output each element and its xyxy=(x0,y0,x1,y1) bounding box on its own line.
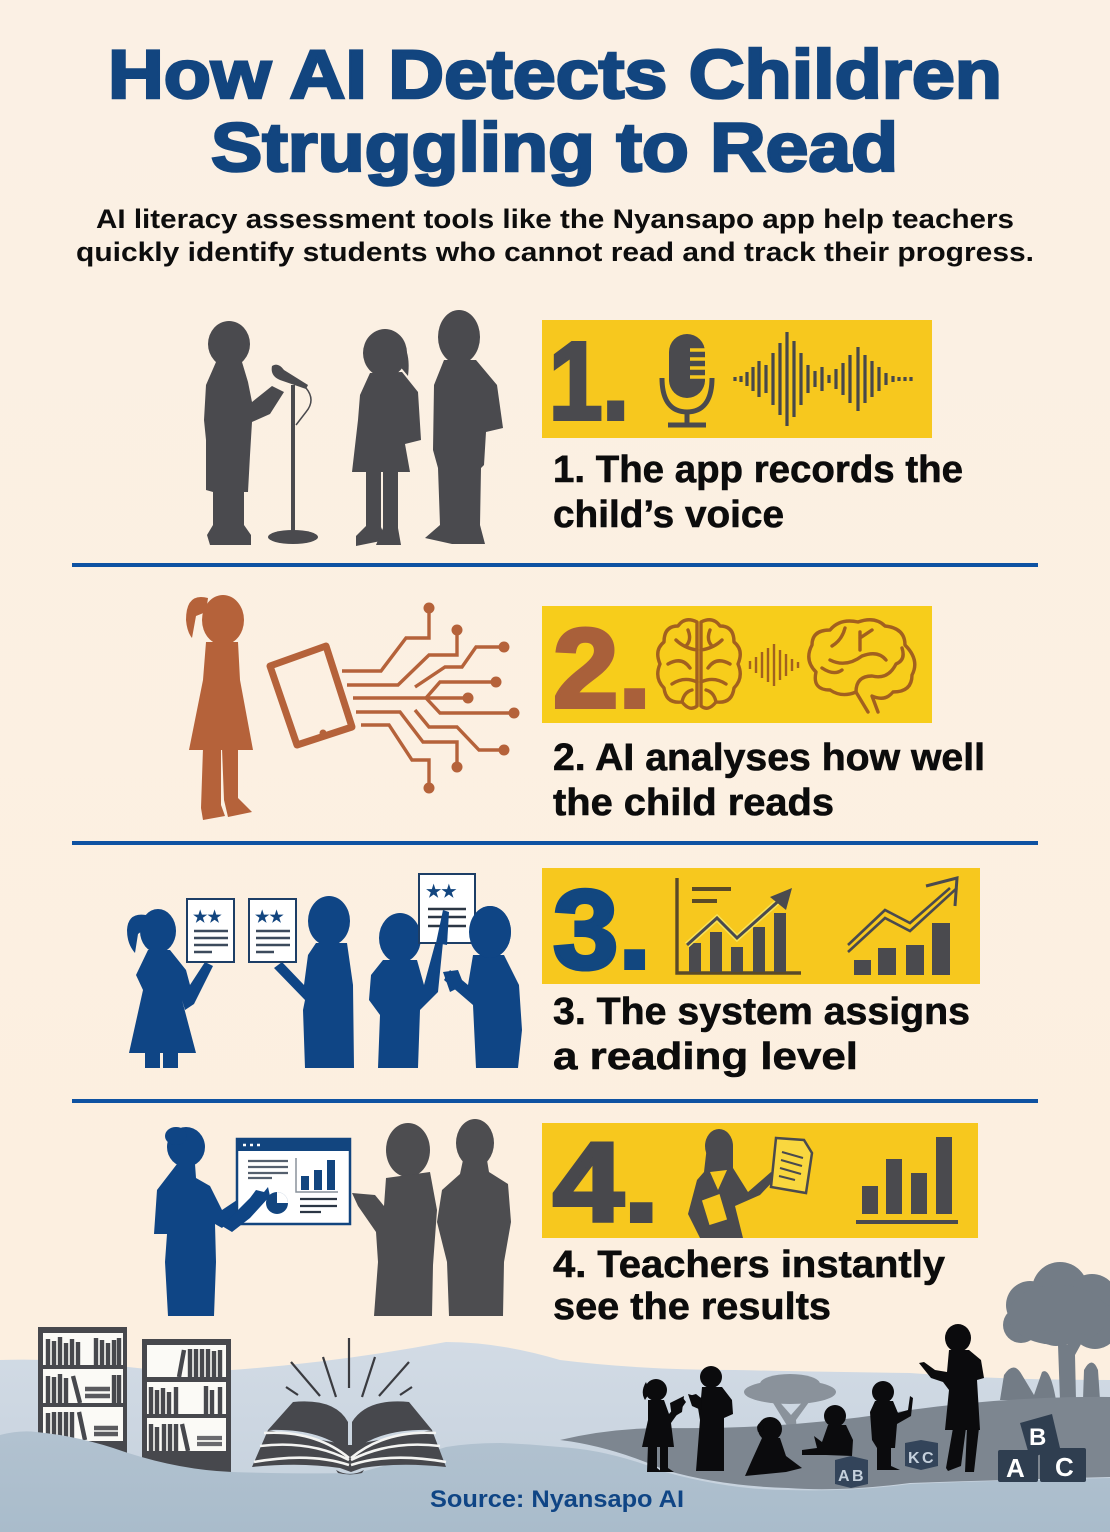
acacia tree xyxy=(744,1374,836,1432)
alphabet blocks AB and KC xyxy=(835,1440,938,1488)
number 4: 4. xyxy=(553,1120,659,1245)
score card 1: ★★ xyxy=(193,909,222,926)
yellow icon band 3 xyxy=(542,867,980,992)
big tree xyxy=(1000,1262,1110,1400)
caption 1: child’s voice xyxy=(553,494,784,536)
step 3 panel xyxy=(127,867,980,1078)
number 2: 2. xyxy=(553,606,651,731)
caption 3: 3. The system assigns xyxy=(553,991,970,1033)
front hill xyxy=(0,1431,1110,1532)
caption 2 xyxy=(553,737,985,824)
alphabet blocks AB and KC: A xyxy=(838,1468,850,1485)
number 1: 1. xyxy=(549,320,629,443)
icon: children holding score cards xyxy=(127,874,522,1068)
icon: side-view brain xyxy=(809,620,915,712)
icon: sound wave xyxy=(735,332,911,426)
bookshelves xyxy=(38,1327,231,1474)
title: Struggling to Read xyxy=(211,109,898,186)
alphabet blocks ABC: C xyxy=(1055,1452,1074,1482)
alphabet blocks ABC: B xyxy=(1029,1424,1046,1451)
caption 3 xyxy=(553,991,970,1078)
step 4 panel xyxy=(154,1119,978,1328)
score card 1 xyxy=(187,899,234,962)
alphabet blocks AB and KC: B xyxy=(852,1468,864,1485)
icon: bar chart xyxy=(856,1137,958,1224)
caption 1 xyxy=(553,449,963,536)
alphabet blocks AB and KC: K xyxy=(908,1450,920,1467)
caption 2: 2. AI analyses how well xyxy=(553,737,985,779)
footer landscape xyxy=(0,1262,1110,1532)
number 3: 3. xyxy=(553,867,651,992)
back hill xyxy=(0,1342,1110,1532)
icon: girl with tablet and circuit lines xyxy=(186,595,520,820)
icon: children at a microphone xyxy=(204,310,503,546)
rays over open book xyxy=(286,1338,412,1397)
alphabet blocks AB and KC: C xyxy=(922,1450,934,1467)
caption 4: 4. Teachers instantly xyxy=(553,1244,945,1286)
subtitle: quickly identify students who cannot read and track their progress. xyxy=(76,237,1034,267)
subtitle xyxy=(76,204,1034,267)
caption 1: 1. The app records the xyxy=(553,449,963,491)
score card 3: ★★ xyxy=(426,882,457,901)
children and teacher silhouettes xyxy=(642,1324,984,1476)
caption 4 xyxy=(553,1244,945,1328)
yellow icon band 4 xyxy=(542,1120,978,1245)
caption 3: a reading level xyxy=(553,1036,858,1078)
score card 2 xyxy=(249,899,296,962)
subtitle: AI literacy assessment tools like the Nyansapo app help teachers xyxy=(96,204,1014,234)
score card 3 xyxy=(419,874,511,958)
icon: growth chart with arrow xyxy=(848,878,957,975)
step 1 panel xyxy=(204,310,963,546)
icon: teacher with document xyxy=(688,1129,812,1238)
icon: rising bar chart xyxy=(677,878,801,973)
alphabet blocks ABC xyxy=(998,1414,1086,1483)
caption 4: see the results xyxy=(553,1286,831,1328)
alphabet blocks ABC: A xyxy=(1006,1453,1025,1483)
source credit: Source: Nyansapo AI xyxy=(430,1486,684,1513)
dashboard panel xyxy=(222,1139,350,1232)
middle hill xyxy=(560,1397,1110,1489)
step 2 panel xyxy=(186,595,985,824)
icon: teacher presenting dashboard to adults xyxy=(154,1119,511,1316)
title: How AI Detects Children xyxy=(108,36,1002,113)
title xyxy=(108,36,1002,186)
score card 2: ★★ xyxy=(255,909,284,926)
caption 2: the child reads xyxy=(553,782,834,824)
yellow icon band 2 xyxy=(542,606,932,731)
yellow icon band 1 xyxy=(542,320,932,443)
open book xyxy=(252,1401,446,1474)
icon: microphone xyxy=(662,334,712,425)
icon: top-view brain xyxy=(658,620,740,708)
icon: small sound wave xyxy=(750,644,798,686)
